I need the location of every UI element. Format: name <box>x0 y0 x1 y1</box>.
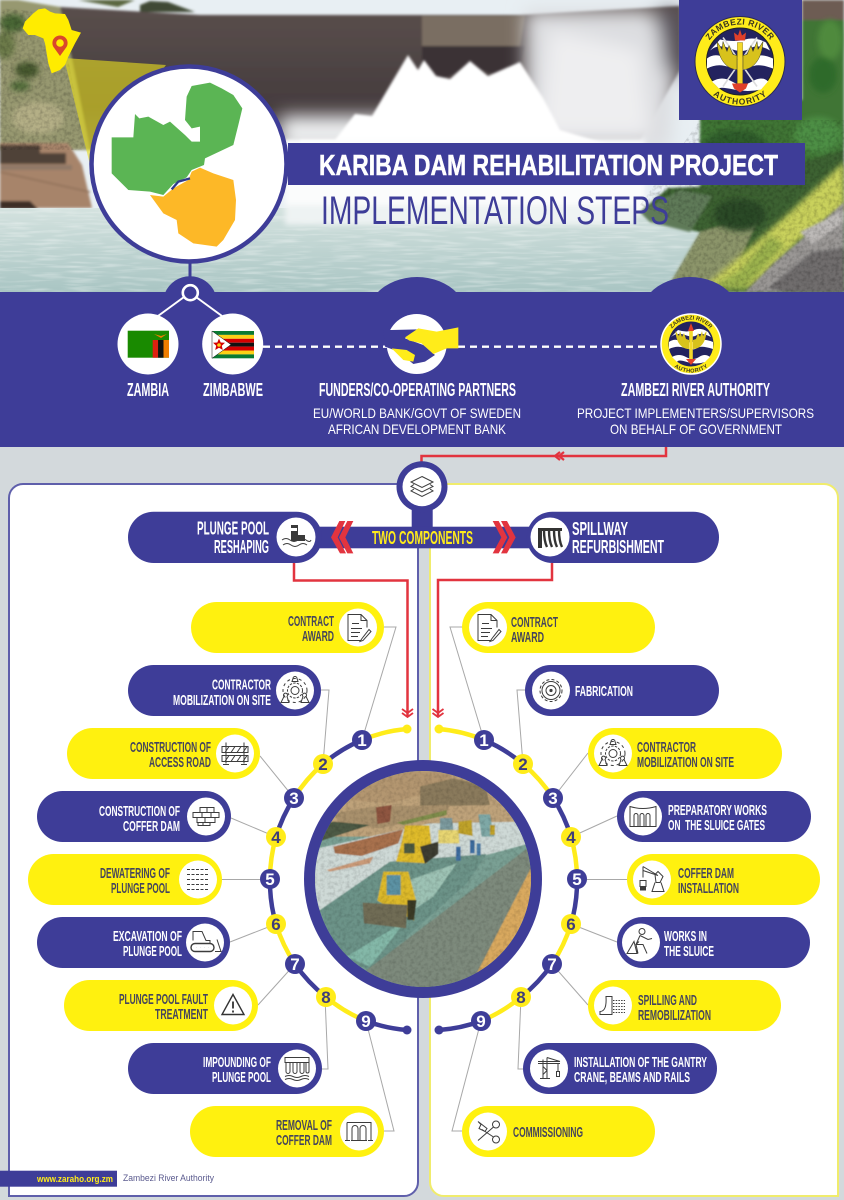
left step 6: excavation <box>37 917 230 968</box>
footer <box>0 1171 214 1187</box>
component: plunge pool reshaping <box>128 512 322 563</box>
logo: Zambezi River Authority <box>660 313 722 375</box>
icon: contract <box>339 608 377 646</box>
label: IMPOUNDING OF <box>203 1054 271 1071</box>
icon: impounding <box>278 1050 316 1088</box>
purple partners band <box>0 276 844 447</box>
icon: spilling <box>594 986 632 1024</box>
left step 7: fault treatment <box>64 980 258 1031</box>
label: COFFER DAM <box>276 1132 332 1149</box>
step numbers: 2 <box>318 755 328 774</box>
text: funders <box>313 380 521 437</box>
step numbers: 6 <box>271 915 281 934</box>
map: Zambia <box>112 83 242 195</box>
two components connector bar <box>200 461 640 553</box>
roller <box>440 818 453 830</box>
icon: location pin <box>52 35 68 56</box>
label: SPILLWAY <box>572 519 628 539</box>
red arrow: plunge pool to timeline <box>294 563 413 717</box>
label <box>668 802 767 834</box>
label <box>130 739 211 771</box>
step numbers <box>471 730 587 1031</box>
label: TREATMENT <box>155 1006 208 1023</box>
label <box>203 1054 271 1086</box>
step numbers: 8 <box>321 988 331 1007</box>
hero photo: Kariba dam spillway <box>0 0 844 292</box>
timeline: plunge pool steps <box>260 724 412 1034</box>
right step 4: preparatory works <box>617 791 811 842</box>
logo square: Zambezi River Authority <box>679 0 802 120</box>
label <box>113 928 182 960</box>
label <box>574 1054 707 1086</box>
right step 6: works in the sluice <box>617 917 810 968</box>
label: DEWATERING OF <box>100 865 170 882</box>
label: CONTRACTOR <box>637 739 696 756</box>
label: COFFER DAM <box>123 818 180 835</box>
map circle: Zambia and Zimbabwe <box>92 66 286 262</box>
left step 3: access road <box>67 728 260 779</box>
step numbers: 2 <box>518 755 528 774</box>
logo text: ZAMBEZI RIVER <box>669 316 712 328</box>
component: spillway refurbishment <box>527 512 719 563</box>
label: CONTRACT <box>288 613 334 630</box>
label: ACCESS ROAD <box>149 754 211 771</box>
leader lines: plunge pool steps <box>222 627 396 1131</box>
loader, middle <box>396 825 432 863</box>
node joining the two countries <box>158 285 222 316</box>
site photo circle <box>300 760 550 1000</box>
label: COMMISSIONING <box>513 1124 583 1141</box>
label: CONTRACTOR <box>212 676 271 694</box>
map: Africa <box>23 8 81 73</box>
label: REFURBISHMENT <box>572 537 664 557</box>
label <box>99 803 180 835</box>
label: INSTALLATION <box>678 880 739 897</box>
icon: gear <box>532 672 570 710</box>
label: INSTALLATION OF THE GANTRY <box>574 1054 707 1071</box>
right step 8: gantry crane <box>523 1043 717 1094</box>
concrete ledge <box>0 143 92 209</box>
loader, foreground <box>377 872 416 921</box>
icon: bulldozer <box>186 924 224 962</box>
label: TWO COMPONENTS <box>372 527 473 548</box>
icon: crane <box>530 1050 568 1088</box>
Lake Kariba <box>172 178 190 189</box>
step numbers: 7 <box>290 955 300 974</box>
label: PLUNGE POOL <box>212 1069 271 1086</box>
right step 5: coffer dam installation <box>627 854 820 905</box>
logo <box>694 16 786 107</box>
red arrow: spillway to timeline <box>432 563 552 717</box>
organisation: Zambezi River Authority <box>123 1173 214 1183</box>
left step 8: impounding <box>128 1043 322 1094</box>
workers <box>456 847 461 861</box>
step numbers: 4 <box>566 828 576 847</box>
step numbers: 3 <box>289 789 299 808</box>
timeline: spillway steps <box>434 724 587 1034</box>
step numbers <box>260 730 376 1031</box>
label: CONTRACT <box>511 614 558 631</box>
label <box>276 1117 332 1149</box>
label: MOBILIZATION ON SITE <box>173 692 271 709</box>
label: PLUNGE POOL FAULT <box>119 991 208 1008</box>
label <box>511 614 558 646</box>
logo text <box>669 316 712 373</box>
red arrow: authority to components <box>422 447 666 464</box>
label: AWARD <box>302 628 334 645</box>
left step 9: removal of coffer dam <box>190 1106 384 1157</box>
icon: scissors <box>469 1112 507 1150</box>
text: funders: EU/WORLD BANK/GOVT OF SWEDEN <box>313 405 521 421</box>
label: COFFER DAM <box>678 865 734 882</box>
step numbers: 7 <box>547 955 557 974</box>
text: Zambezi River Authority: ON BEHALF OF GOVERNMENT <box>610 421 782 437</box>
icon: water <box>179 860 217 898</box>
leader lines: spillway steps <box>450 627 627 1131</box>
logo text: AUTHORITY <box>674 364 707 373</box>
icon: bricks <box>187 798 225 836</box>
step numbers: 1 <box>479 731 489 750</box>
step numbers: 5 <box>572 870 582 889</box>
label <box>119 991 208 1023</box>
icon: spillway <box>530 518 570 556</box>
connector line from map circle <box>188 262 192 278</box>
label <box>572 519 664 557</box>
icon: coffer dam <box>340 1112 378 1150</box>
label <box>678 865 739 897</box>
logo text: ZAMBEZI RIVER <box>705 18 774 40</box>
panel: spillway refurbishment <box>430 484 838 1196</box>
left step 5: dewatering <box>28 854 222 905</box>
icon: pool <box>276 518 316 556</box>
right step 3: contractor mobilization <box>588 728 782 779</box>
icon: layers <box>396 461 448 512</box>
label: AWARD <box>511 629 544 646</box>
right step 7: spilling <box>588 980 781 1031</box>
label: RESHAPING <box>214 537 269 557</box>
label: CRANE, BEAMS AND RAILS <box>574 1069 690 1086</box>
callout wedge <box>64 58 166 165</box>
icon: cranes <box>633 860 671 898</box>
label <box>288 613 334 645</box>
label: WORKS IN <box>664 928 707 945</box>
panel: plunge pool reshaping <box>9 484 418 1196</box>
label: FABRICATION <box>575 683 633 700</box>
label: PREPARATORY WORKS <box>668 802 767 819</box>
label <box>638 992 711 1024</box>
left step 1: contract award <box>191 602 384 653</box>
left step 2: contractor mobilization <box>128 665 321 716</box>
step numbers: 6 <box>566 915 576 934</box>
Africa locator callout <box>23 8 166 165</box>
icon: warning <box>214 986 252 1024</box>
step numbers: 9 <box>361 1012 371 1031</box>
text: funders: AFRICAN DEVELOPMENT BANK <box>328 421 507 437</box>
right bank vegetation <box>640 0 844 292</box>
icon: Zimbabwe flag <box>202 314 263 374</box>
label: SPILLING AND <box>638 992 697 1009</box>
icon: sluice gates <box>624 798 662 836</box>
title bar <box>288 143 805 185</box>
label: CONSTRUCTION OF <box>130 739 211 756</box>
chevrons left <box>331 521 353 553</box>
label: REMOBILIZATION <box>638 1007 711 1024</box>
right step 9: commissioning <box>462 1106 655 1157</box>
label <box>664 928 714 960</box>
step numbers: 9 <box>476 1012 486 1031</box>
step numbers: 1 <box>357 731 367 750</box>
text: Zambezi River Authority <box>577 380 814 437</box>
label: MOBILIZATION ON SITE <box>637 754 734 771</box>
icon: road barrier <box>216 734 254 772</box>
label <box>173 676 271 709</box>
label: EXCAVATION OF <box>113 928 182 945</box>
text: funders: FUNDERS/CO-OPERATING PARTNERS <box>319 380 516 400</box>
labels: countries: ZIMBABWE <box>203 380 263 400</box>
label: REMOVAL OF <box>276 1117 332 1134</box>
label: PLUNGE POOL <box>123 943 182 960</box>
labels: countries: ZAMBIA <box>127 380 169 400</box>
label <box>100 865 170 897</box>
label: ON THE SLUICE GATES <box>668 817 765 834</box>
icon: contract <box>469 608 507 646</box>
label: PLUNGE POOL <box>111 880 170 897</box>
label: CONSTRUCTION OF <box>99 803 180 820</box>
website: www.zaraho.org.zm <box>36 1174 113 1185</box>
label: PLUNGE POOL <box>197 518 269 538</box>
spray <box>280 10 682 150</box>
icon: mobilization <box>276 672 314 710</box>
icon: Zambia flag <box>118 314 178 374</box>
step numbers: 3 <box>548 789 558 808</box>
step numbers: 5 <box>265 870 275 889</box>
icon: mobilization <box>594 734 632 772</box>
map: Zimbabwe <box>150 168 236 247</box>
subtitle: IMPLEMENTATION STEPS <box>321 189 669 233</box>
right step 2: fabrication <box>525 665 719 716</box>
labels: countries <box>127 380 263 400</box>
step numbers: 4 <box>271 828 281 847</box>
label <box>637 739 734 771</box>
label <box>197 518 269 557</box>
logo text: AUTHORITY <box>713 90 765 104</box>
step numbers: 8 <box>516 988 526 1007</box>
construction site photo <box>315 771 531 987</box>
right step 1: contract award <box>462 602 655 653</box>
chevrons right <box>493 521 516 553</box>
logo text <box>705 18 774 104</box>
icon: worker <box>622 924 660 962</box>
left step 4: coffer dam <box>37 791 231 842</box>
label: THE SLUICE <box>664 943 714 960</box>
icon: handshake <box>383 314 458 374</box>
dashed connector <box>263 346 662 348</box>
